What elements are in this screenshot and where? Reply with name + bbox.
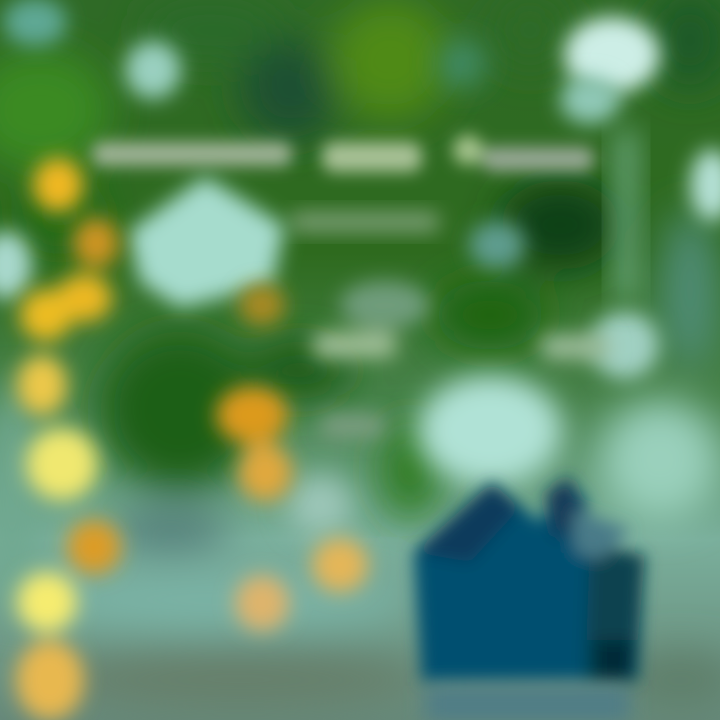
- icon: pale cloud above house: [288, 375, 562, 535]
- icon: pale house or shield shape: [128, 176, 285, 308]
- title placeholder: [92, 135, 594, 172]
- bokeh: pale lights: [0, 0, 720, 379]
- text block placeholder, upper right: [312, 281, 610, 437]
- coin cluster centre: [216, 284, 368, 631]
- coin column left: [16, 158, 121, 720]
- icon: blue house: [414, 476, 645, 720]
- subtitle placeholder: [290, 212, 440, 232]
